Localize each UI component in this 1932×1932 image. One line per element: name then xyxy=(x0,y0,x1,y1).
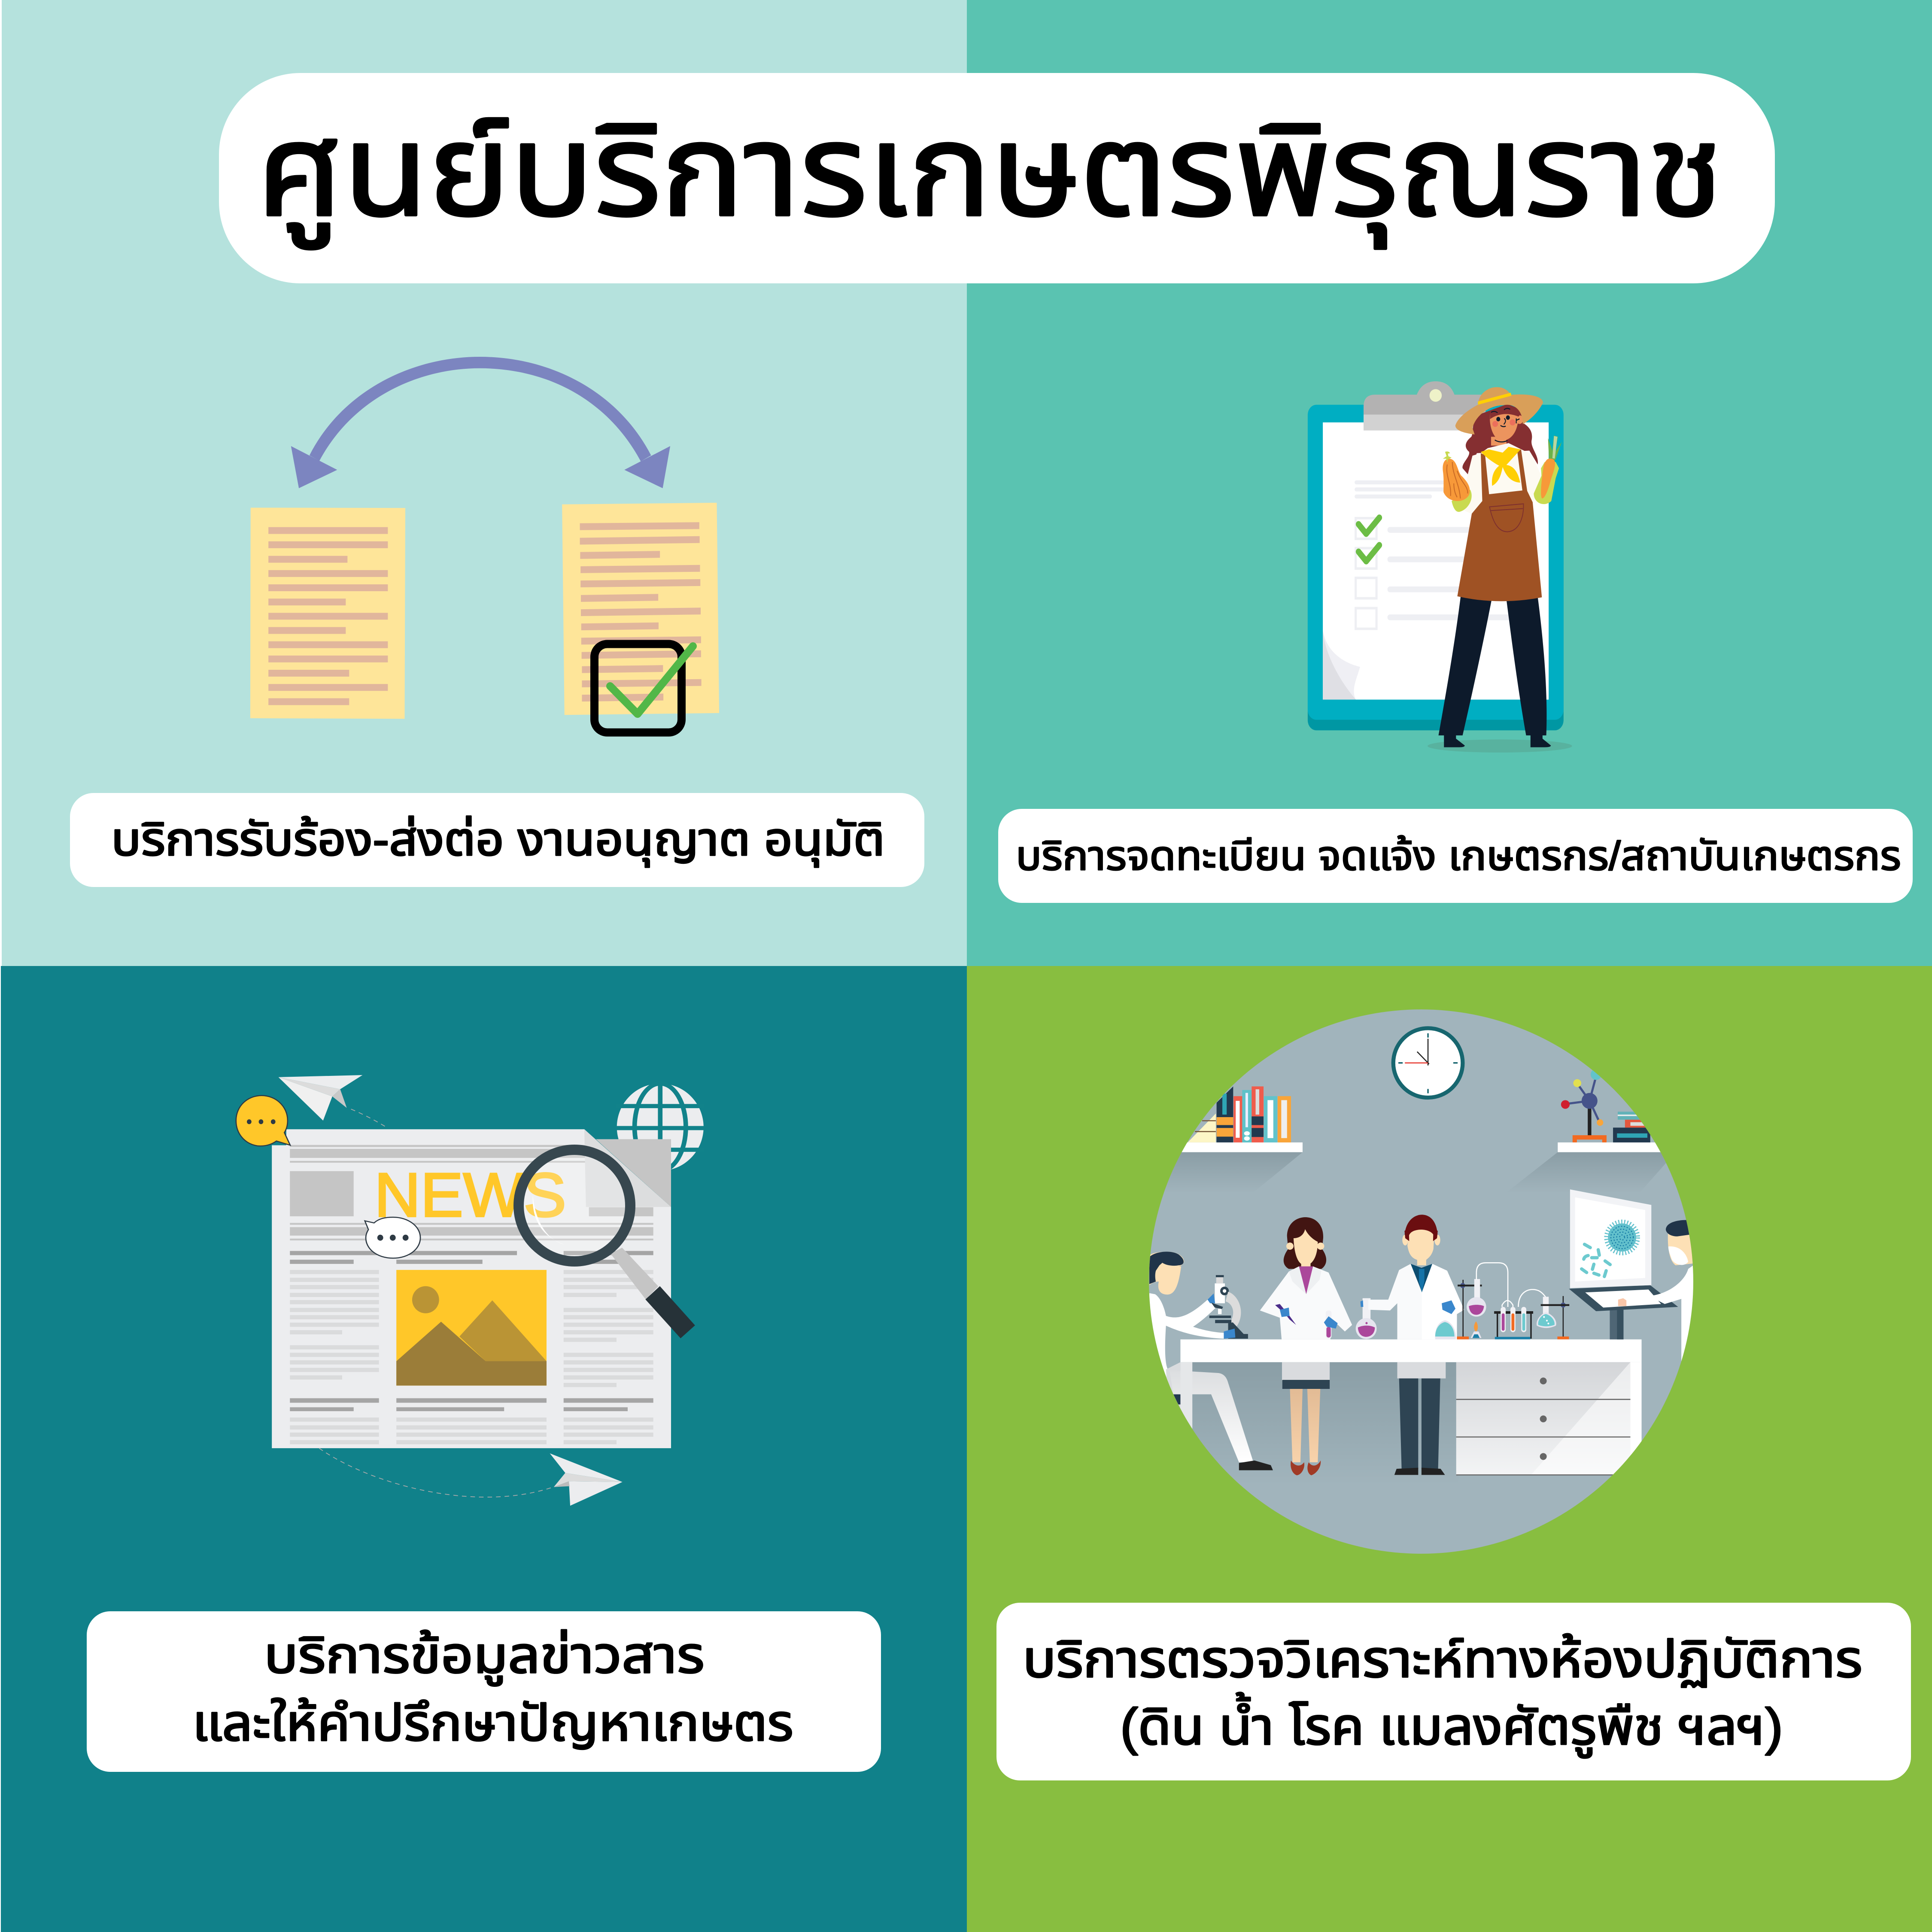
panel: top-right background xyxy=(967,0,1932,966)
icon: globe xyxy=(616,1083,704,1173)
clipboard xyxy=(1308,381,1564,730)
caption: bottom-right xyxy=(996,1603,1911,1780)
scientist: woman xyxy=(1260,1217,1352,1475)
icon: paper plane top xyxy=(278,1075,388,1128)
under-table shadow xyxy=(1180,1362,1459,1485)
panel: bottom-left background xyxy=(1,966,967,1932)
title: ศูนย์บริการเกษตรพิรุณราช xyxy=(257,98,1723,249)
icon: yellow speech bubble xyxy=(236,1096,290,1146)
shelf: left with books xyxy=(1163,1086,1303,1193)
shelf: right with molecule model and books xyxy=(1525,1070,1666,1179)
farmer xyxy=(1428,387,1572,753)
newspaper page xyxy=(272,1129,671,1448)
caption: bottom-right: (ดิน น้ำ โรค แมลงศัตรูพืช ฯลฯ) xyxy=(1120,1692,1783,1758)
photo in newspaper xyxy=(396,1270,547,1385)
scientist: man with mask xyxy=(1618,1220,1693,1361)
caption: bottom-left: และให้คำปรึกษาปัญหาเกษตร xyxy=(192,1695,793,1752)
caption: top-right: บริการจดทะเบียน จดแจ้ง เกษตรกร/สถาบันเกษตรกร xyxy=(1016,833,1901,879)
illustration: documents exchange xyxy=(250,357,719,719)
caption: bottom-right: บริการตรวจวิเคราะห์ทางห้องปฏิบัติการ xyxy=(1023,1631,1862,1688)
icon: white speech bubble xyxy=(365,1217,420,1258)
caption: bottom-left: บริการข้อมูลข่าวสาร xyxy=(264,1627,705,1686)
title xyxy=(219,73,1775,283)
illustration: laboratory xyxy=(1141,1009,1693,1554)
document: left xyxy=(250,507,405,719)
icon: magnifier lens xyxy=(519,1150,630,1261)
flask: purple on table xyxy=(1356,1298,1377,1339)
lab table with drawers xyxy=(1180,1340,1642,1478)
monitor with microbes xyxy=(1569,1189,1678,1340)
illustration: newspaper xyxy=(236,1075,704,1506)
distillation apparatus xyxy=(1457,1263,1569,1340)
caption: top-left xyxy=(70,793,924,887)
illustration: farmer and clipboard xyxy=(1308,381,1572,753)
icon: paper plane bottom xyxy=(319,1448,623,1506)
scientist: seated at microscope xyxy=(1149,1252,1273,1470)
icon: magnifier handle xyxy=(611,1248,695,1338)
caption: bottom-left xyxy=(87,1611,881,1772)
headline: NEWS: NEWS xyxy=(374,1160,566,1230)
icon: double-headed curved arrow xyxy=(291,357,670,488)
scientist: man xyxy=(1361,1215,1464,1475)
panel: top-left background xyxy=(2,0,967,966)
caption: top-right xyxy=(998,809,1913,903)
caption: top-left: บริการรับร้อง-ส่งต่อ งานอนุญาต อนุมัติ xyxy=(111,814,885,867)
icon: checkbox with green tick xyxy=(594,644,693,732)
panel: bottom-right background xyxy=(967,966,1932,1932)
flask: teal on table xyxy=(1435,1320,1456,1340)
wall clock xyxy=(1393,1028,1463,1098)
document: right xyxy=(562,503,719,715)
